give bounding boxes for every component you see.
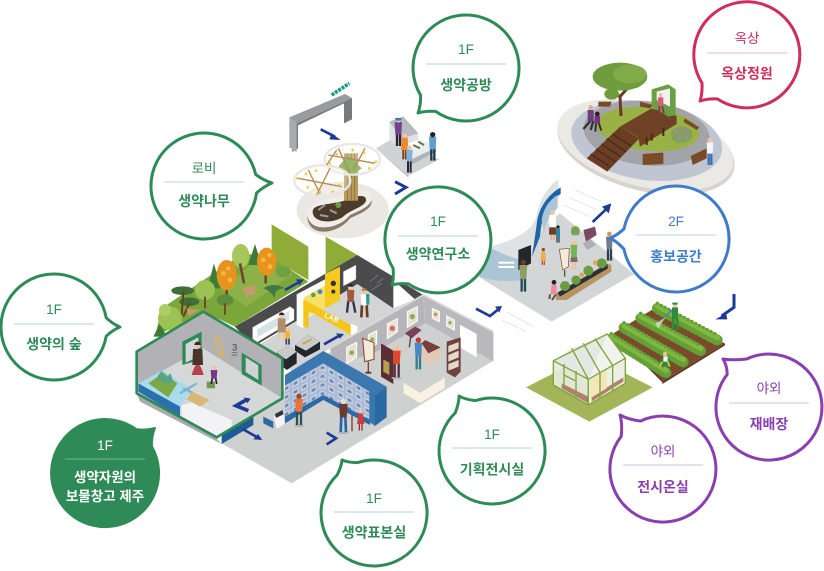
rooftop garden	[548, 63, 744, 212]
lobby gate	[289, 83, 352, 152]
callout: promotion space	[610, 186, 729, 292]
herb tree island	[294, 144, 389, 238]
green door left	[182, 332, 202, 365]
forest trees and animals	[153, 244, 291, 337]
greenhouse	[553, 334, 625, 405]
callout: special exhibition room: 1F	[484, 427, 500, 442]
illustration: lobby gate, herb tree and workshop	[289, 83, 439, 238]
illustration: rooftop garden and second floor	[478, 63, 744, 332]
callout: rooftop garden: 옥상정원	[721, 66, 773, 82]
Jeju diorama	[138, 370, 197, 417]
room visitors	[192, 342, 204, 375]
framed pictures	[347, 307, 454, 363]
arrow	[321, 129, 341, 140]
callout: treasure storehouse Jeju	[51, 419, 159, 527]
callout: rooftop garden	[694, 2, 800, 108]
base under front room	[137, 383, 253, 444]
front room: treasure storehouse Jeju	[137, 312, 282, 437]
lab visitors	[277, 284, 369, 345]
callout: herb research lab	[385, 187, 491, 293]
arrow to rooftop	[593, 203, 611, 222]
farmers	[655, 302, 678, 367]
callout: treasure storehouse Jeju: 보물창고 제주	[66, 489, 144, 504]
lab displays: LAB	[323, 311, 340, 325]
lab dark wall	[235, 255, 423, 347]
green border	[137, 312, 282, 437]
forest ground	[155, 253, 308, 337]
DNA graphic: 3	[232, 343, 237, 353]
callout: lobby herb tree: 로비	[192, 161, 216, 176]
callout: cultivation farm: 재배장	[750, 416, 788, 432]
callout: treasure storehouse Jeju: 생약자원의	[74, 470, 136, 485]
callout: herb forest	[1, 274, 120, 380]
blue specimen storage	[285, 351, 387, 426]
callout: herb workshop: 생약공방	[440, 77, 492, 93]
greenhouse base	[526, 355, 653, 422]
callout: special exhibition room: 기획전시실	[460, 462, 524, 478]
farm field	[611, 303, 725, 384]
white display case	[182, 382, 232, 436]
promotion curved wall	[479, 179, 561, 281]
callout: cultivation farm: 야외	[757, 381, 781, 396]
second floor platform	[478, 213, 634, 322]
planter	[556, 226, 611, 300]
chevron steps	[502, 190, 602, 332]
illustration: main first floor building	[137, 224, 502, 483]
arrow to farm	[715, 294, 734, 319]
callout: specimen room: 생약표본실	[342, 524, 406, 540]
workshop floor and tables	[376, 117, 439, 177]
callout: rooftop garden: 옥상	[735, 31, 759, 46]
workshop visitors	[395, 117, 436, 173]
exhibition visitors	[391, 337, 422, 379]
callout: greenhouse	[610, 415, 716, 522]
callout: herb workshop	[413, 15, 519, 121]
callout: treasure storehouse Jeju: 1F	[97, 438, 113, 453]
second floor visitors	[519, 210, 613, 300]
green wall panels	[272, 224, 357, 280]
arrow	[395, 182, 406, 194]
callout: herb research lab: 1F	[430, 214, 446, 229]
callout: promotion space: 2F	[668, 214, 684, 229]
illustration: outdoor greenhouse and farm	[526, 302, 725, 422]
callout: greenhouse: 전시온실	[637, 479, 689, 495]
lab floor	[252, 284, 413, 372]
callout: specimen room: 1F	[366, 491, 382, 506]
callout: cultivation farm	[716, 354, 822, 460]
callout: specimen room	[321, 460, 427, 566]
green door right	[242, 353, 262, 386]
callout: special exhibition room	[439, 396, 545, 504]
callout: lobby herb tree	[151, 133, 272, 239]
callout: herb forest: 생약의 숲	[26, 336, 82, 352]
storage visitors	[263, 394, 364, 434]
rooftop visitors	[583, 93, 713, 165]
exhibition room walls	[330, 295, 493, 367]
callout: promotion space: 홍보공간	[650, 248, 702, 264]
arrow heads	[244, 279, 502, 440]
lab displays	[253, 265, 383, 370]
callout: lobby herb tree: 생약나무	[178, 193, 230, 209]
callout: herb forest: 1F	[46, 302, 62, 317]
exhibition furniture	[363, 327, 461, 403]
callout: herb workshop: 1F	[458, 42, 474, 57]
callout: greenhouse: 야외	[651, 444, 675, 459]
exhibition room floor	[222, 320, 493, 483]
DNA graphic	[213, 337, 237, 358]
navigation arrows on first floor	[236, 282, 498, 444]
callout: herb research lab: 생약연구소	[406, 246, 470, 262]
